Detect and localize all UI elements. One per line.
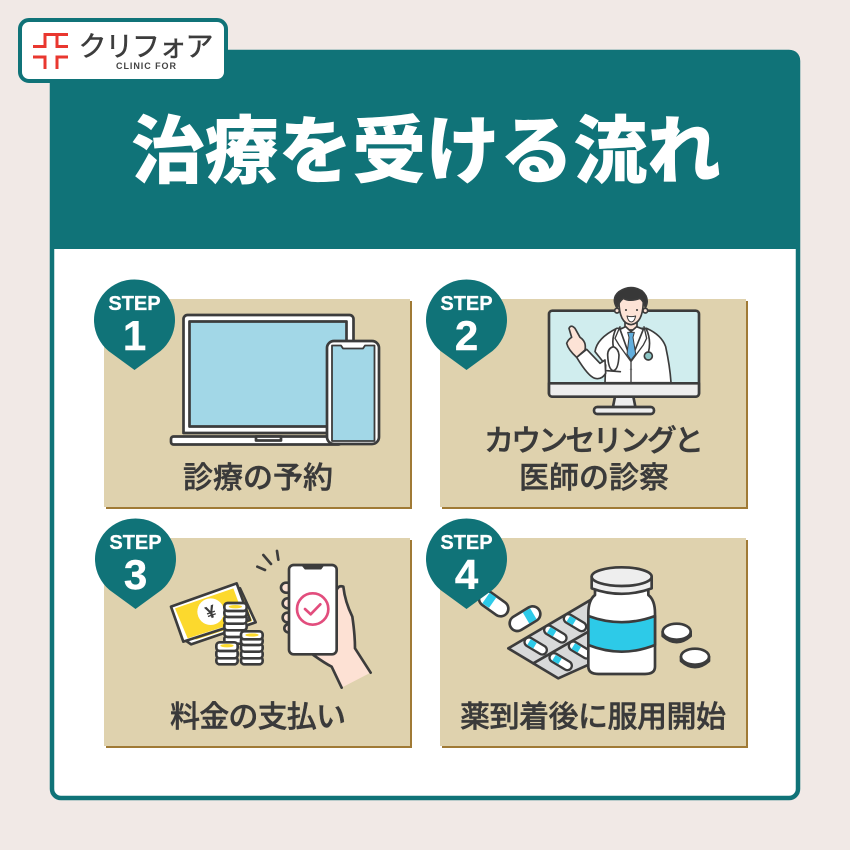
step badge 4: STEP [440,532,493,554]
panel: step 4 [426,518,748,748]
title: 治療を受ける流れ [131,110,721,193]
icon: doctor [567,288,671,383]
step badge 4 [426,518,507,609]
step badge 4: 4 [455,551,479,598]
label: カウンセリングと [484,425,704,458]
icon: hand [281,583,371,688]
icon: yen bills: ¥ [203,601,219,623]
logo wordmark: クリフォア [78,31,214,62]
step badge 2: STEP [440,293,493,315]
step badge 1: 1 [123,312,146,359]
label: 医師の診察 [519,462,669,495]
label: 診療の予約 [183,462,333,495]
step badge 1: STEP [108,293,161,315]
step badge 2 [426,279,507,370]
label: 料金の支払い [170,701,346,734]
icon: coin stacks [216,603,263,664]
icon: smartphone [327,341,379,444]
panel: step 1 [94,279,412,509]
logo [20,20,226,81]
step badge 3: STEP [109,532,162,554]
icon: laptop [171,315,354,444]
logo icon [33,34,68,69]
icon: capsules [486,598,533,623]
icon: monitor [549,311,699,414]
step badge 3 [95,518,176,609]
panel: step 2 [426,279,748,509]
logo subtitle: CLINIC FOR [116,61,176,71]
icon: blister pack [508,599,592,678]
step badge 2: 2 [455,312,478,359]
icon: phone with check [257,551,337,654]
icon: medicine bottle [588,567,655,674]
label [484,425,704,495]
icon: tablets [663,624,709,667]
step badge 3: 3 [124,551,147,598]
icon: yen bills [171,583,256,644]
panel: step 3 [95,518,412,748]
label: 薬到着後に服用開始 [460,701,726,734]
main panel [50,50,800,798]
step badge 1 [94,279,175,370]
